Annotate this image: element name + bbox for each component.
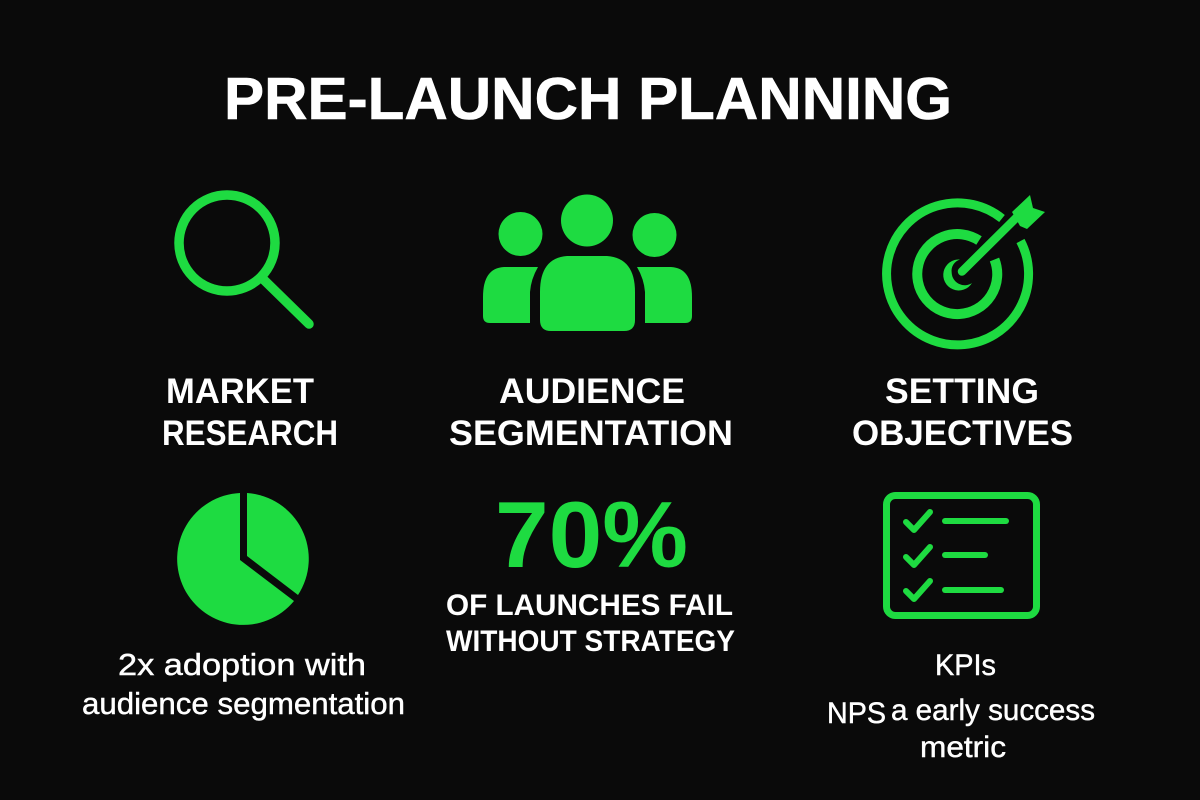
icon: target with arrow <box>887 195 1045 345</box>
big number: 70%: 70% <box>495 482 688 587</box>
panel: adoption statistic <box>82 493 405 721</box>
text: KPI caption: NPS <box>827 697 886 730</box>
text: adoption caption <box>82 647 405 721</box>
heading: setting objectives: SETTING <box>885 372 1039 411</box>
panel: failure statistic <box>446 482 735 658</box>
heading: market research: RESEARCH <box>162 414 338 453</box>
text: adoption caption: 2x adoption with <box>118 647 366 682</box>
heading: setting objectives: OBJECTIVES <box>852 414 1073 453</box>
heading: audience segmentation: AUDIENCE <box>499 372 685 411</box>
text: failure caption: OF LAUNCHES FAIL <box>446 589 733 622</box>
icon: checklist <box>886 496 1036 616</box>
heading: setting objectives <box>852 372 1073 453</box>
panel: market research <box>162 195 338 453</box>
heading: market research <box>162 372 338 453</box>
icon: pie chart <box>177 493 309 625</box>
icon: magnifying glass <box>179 195 309 324</box>
text: KPI caption: metric <box>920 731 1006 764</box>
title: PRE-LAUNCH PLANNING <box>224 66 952 132</box>
text: KPI caption: a early success <box>891 694 1095 727</box>
panel: setting objectives <box>852 195 1073 453</box>
panel: KPIs <box>827 496 1095 764</box>
heading: audience segmentation <box>449 372 733 453</box>
panel: audience segmentation <box>449 194 733 453</box>
text: failure caption <box>446 589 735 658</box>
text: KPI caption <box>827 649 1095 764</box>
text: failure caption: WITHOUT STRATEGY <box>446 625 735 658</box>
text: KPI caption: KPIs <box>935 649 996 682</box>
heading: market research: MARKET <box>166 372 314 411</box>
text: adoption caption: audience segmentation <box>82 686 405 721</box>
icon: three people <box>483 194 692 331</box>
heading: audience segmentation: SEGMENTATION <box>449 414 733 453</box>
